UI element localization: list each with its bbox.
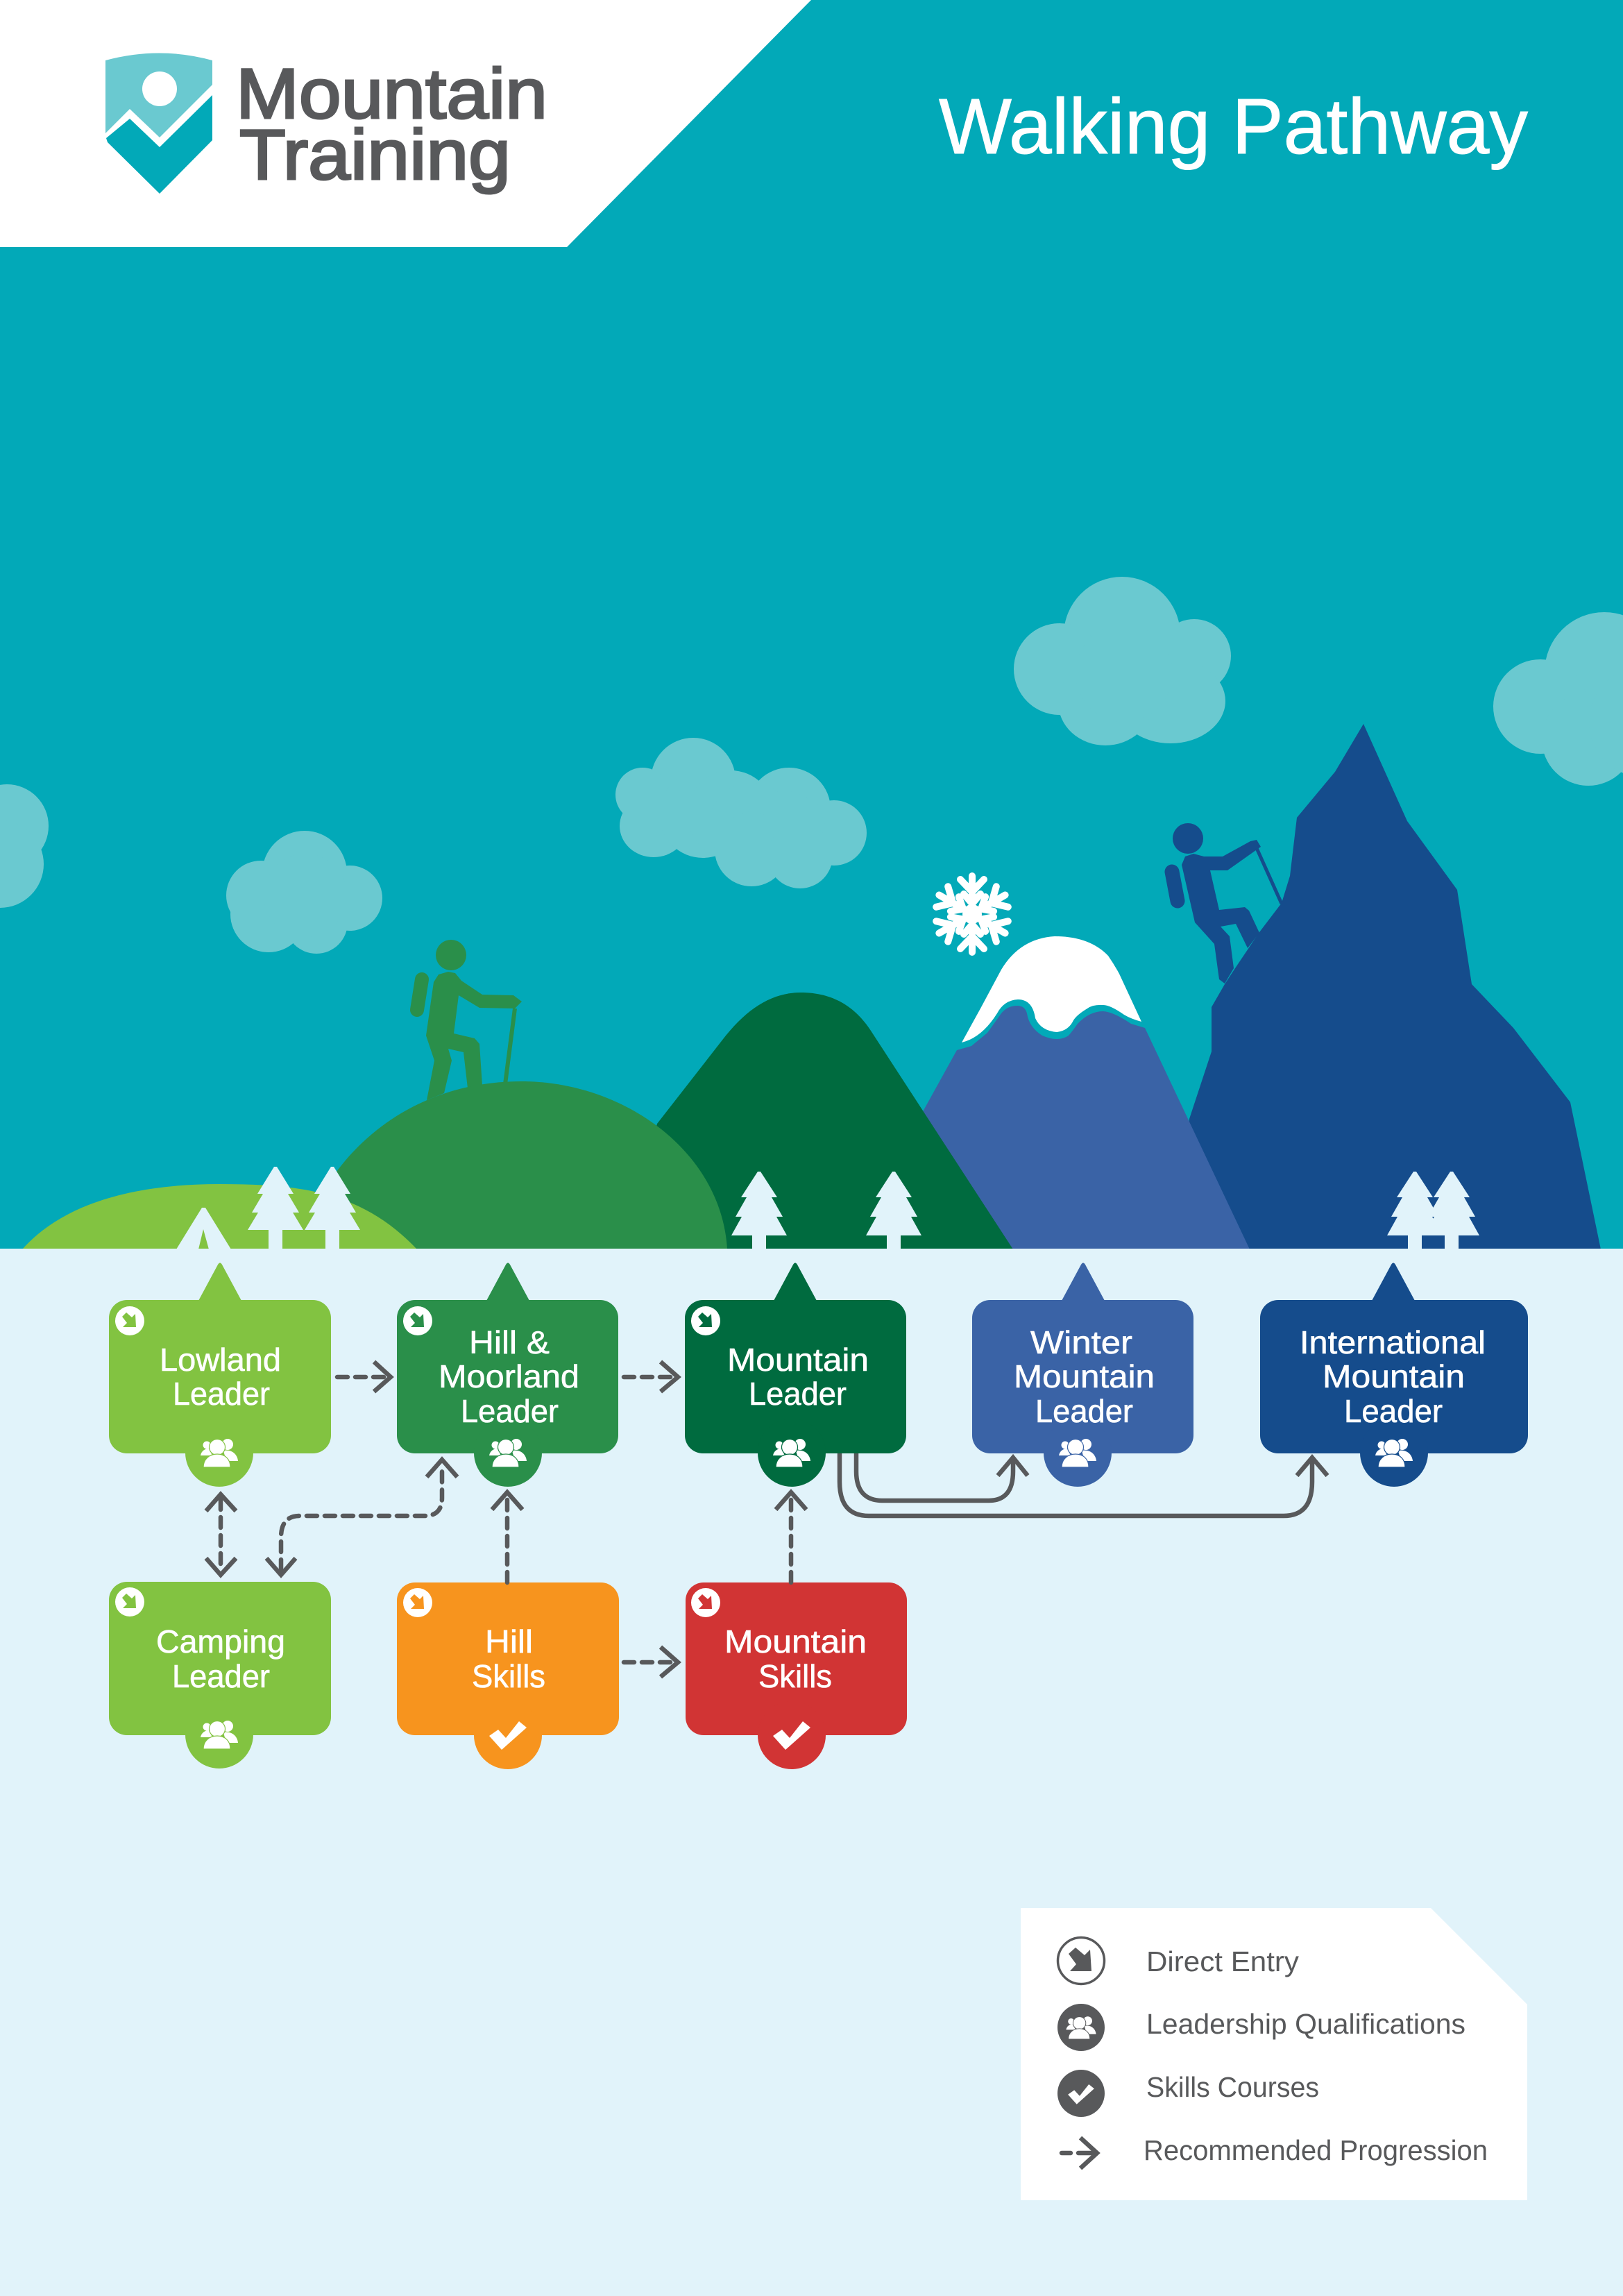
label: Leader	[749, 1376, 847, 1412]
card: Mountain Skills	[686, 1582, 907, 1769]
arrow: Mountain Leader to International	[840, 1453, 1327, 1516]
logo wordmark	[236, 54, 547, 194]
label: Leader	[173, 1376, 270, 1412]
leadership icon	[201, 1721, 238, 1749]
direct entry badge	[691, 1588, 720, 1617]
green hill	[298, 1081, 727, 1249]
legend label: leadership: Leadership Qualifications	[1146, 2008, 1465, 2040]
leadership icon	[1059, 1439, 1096, 1467]
legend label: progression: Recommended Progression	[1144, 2134, 1488, 2166]
leadership icon	[201, 1439, 238, 1467]
label: Camping	[156, 1623, 285, 1660]
climber figure	[1172, 823, 1282, 984]
label: Skills	[758, 1658, 832, 1694]
cloud: far left	[0, 784, 49, 908]
snowflake icon	[933, 876, 1011, 952]
legend label: direct entry: Direct Entry	[1146, 1945, 1300, 1977]
label: International	[1300, 1324, 1486, 1360]
label: Mountain	[1014, 1358, 1155, 1394]
logo shield icon	[105, 53, 212, 194]
label	[472, 1623, 545, 1694]
title: Walking Pathway	[939, 83, 1528, 170]
card: Lowland Leader	[109, 1263, 331, 1487]
legend icon: leadership	[1057, 2004, 1105, 2051]
card: Camping Leader	[109, 1582, 331, 1769]
legend icon: skills	[1057, 2070, 1105, 2117]
label	[439, 1324, 579, 1429]
light green hill	[22, 1184, 417, 1249]
card: Hill Skills	[397, 1582, 619, 1769]
cloud: middle	[615, 738, 867, 888]
label: Mountain	[1323, 1358, 1465, 1394]
label	[724, 1623, 867, 1694]
arrow: Mountain Skills to Mountain Leader	[776, 1492, 806, 1582]
label: Mountain	[724, 1623, 867, 1660]
cloud: upper	[1014, 577, 1231, 745]
card: Hill and Moorland Leader	[397, 1263, 618, 1487]
direct entry badge	[115, 1306, 144, 1335]
tent icon	[176, 1208, 231, 1249]
arrow: Hill Skills to Hill and Moorland	[492, 1492, 522, 1582]
trees on lowland hill	[248, 1167, 360, 1249]
arrow: Lowland and Camping double	[206, 1494, 236, 1575]
arrow: Hill and Moorland to Mountain Leader	[624, 1362, 678, 1392]
direct entry badge	[403, 1306, 432, 1335]
legend icon: progression arrow	[1062, 2138, 1097, 2168]
legend panel	[1021, 1908, 1527, 2200]
logo wordmark: Mountain	[236, 54, 547, 133]
check icon	[489, 1721, 527, 1750]
legend icon: direct entry	[1057, 1938, 1105, 1984]
arrow: Hill Skills to Mountain Skills	[624, 1647, 678, 1677]
navy mountain	[1180, 724, 1601, 1249]
label	[160, 1342, 281, 1412]
logo wordmark: Training	[239, 115, 511, 194]
direct entry badge	[403, 1588, 432, 1617]
header white logo panel	[0, 0, 811, 247]
label: Leader	[172, 1658, 270, 1694]
label: Lowland	[160, 1342, 281, 1378]
label: Hill	[485, 1623, 533, 1660]
arrow: Camping and Hill and Moorland double	[266, 1460, 457, 1575]
legend label: skills: Skills Courses	[1146, 2071, 1319, 2103]
tree on mountain right	[866, 1172, 921, 1249]
snow cap	[962, 936, 1141, 1043]
label	[1300, 1324, 1486, 1429]
logo: Mountain Training	[105, 53, 547, 194]
label: Skills	[472, 1658, 545, 1694]
leadership icon	[1375, 1439, 1413, 1467]
leadership icon	[489, 1439, 527, 1467]
label: Moorland	[439, 1358, 579, 1394]
dark green mountain	[624, 993, 1013, 1249]
label: Leader	[1344, 1393, 1443, 1429]
sky background	[0, 0, 1623, 1249]
check icon	[773, 1721, 810, 1750]
cloud: left	[226, 831, 382, 954]
label	[727, 1342, 869, 1412]
direct entry badge	[691, 1306, 720, 1335]
card: International Mountain Leader	[1260, 1263, 1528, 1487]
tree on mountain left	[731, 1172, 787, 1249]
leadership icon	[773, 1439, 810, 1467]
label	[156, 1623, 285, 1694]
card: Winter Mountain Leader	[972, 1263, 1193, 1487]
card: Mountain Leader	[685, 1263, 906, 1487]
label: Winter	[1030, 1324, 1132, 1360]
label: Hill &	[469, 1324, 550, 1360]
arrow: Mountain Leader to Winter	[856, 1453, 1028, 1501]
direct entry badge	[115, 1587, 144, 1617]
label: Leader	[1035, 1393, 1133, 1429]
ground	[0, 1249, 1623, 2296]
label: Mountain	[727, 1342, 869, 1378]
label: Leader	[461, 1393, 559, 1429]
cloud: far right	[1493, 612, 1623, 786]
trees on navy mountain	[1387, 1172, 1479, 1249]
winter mountain	[847, 1006, 1250, 1249]
label	[1014, 1324, 1155, 1429]
arrow: Lowland to Hill and Moorland	[337, 1362, 391, 1392]
walker figure	[417, 940, 522, 1100]
